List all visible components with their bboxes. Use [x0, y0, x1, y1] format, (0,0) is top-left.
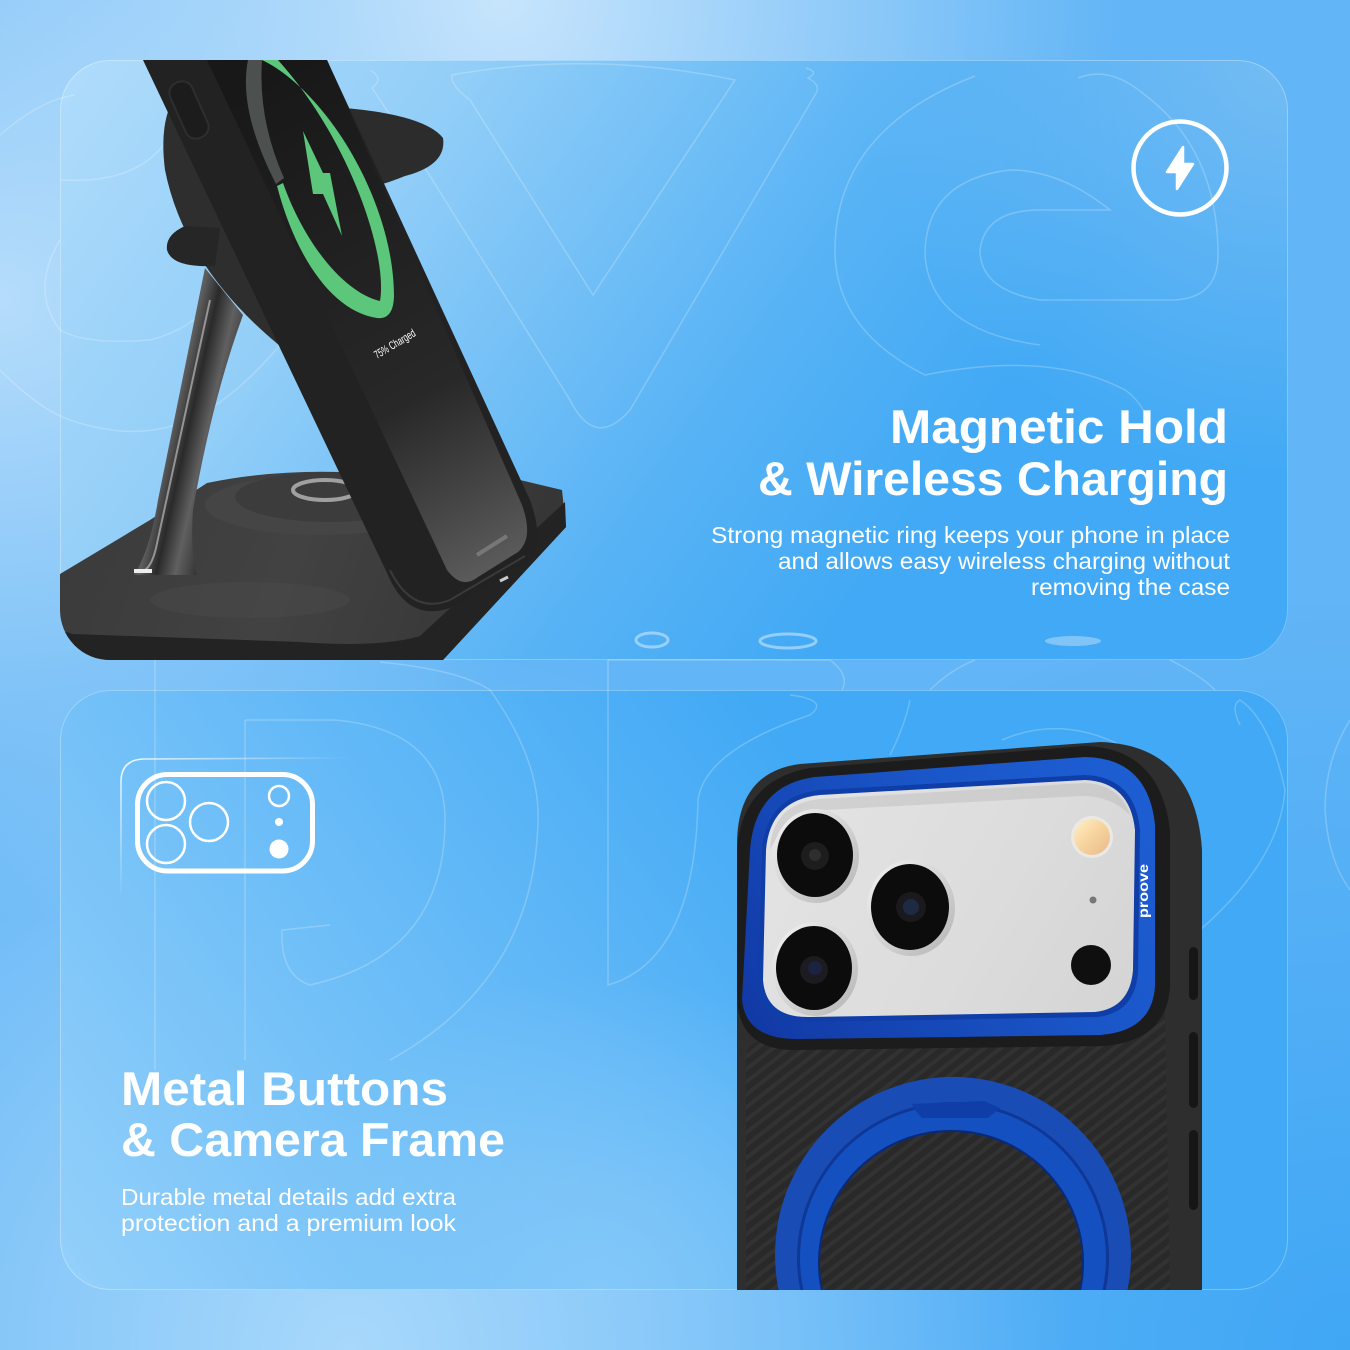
- body text: removing the case: [1031, 574, 1230, 600]
- panel background: [60, 690, 1288, 1290]
- lidar sensor: [1071, 945, 1111, 985]
- side buttons: [1189, 947, 1198, 1210]
- case shell: [737, 742, 1202, 1290]
- stand knob: [167, 226, 220, 266]
- panel: metal buttons and camera frame: [60, 660, 1350, 1290]
- watermark letter outlines: [155, 660, 1350, 1070]
- body text: [711, 522, 1230, 600]
- flash: [1071, 816, 1113, 858]
- stand back disc: [163, 112, 278, 345]
- panel background: [60, 60, 1288, 660]
- panel: magnetic hold and wireless charging: [0, 60, 1288, 660]
- body text: Strong magnetic ring keeps your phone in place: [711, 522, 1230, 548]
- carbon fibre back: [746, 1010, 1170, 1290]
- heading: Metal Buttons: [121, 1062, 448, 1115]
- icon: lightning bolt in circle: [1134, 122, 1226, 214]
- body text: [121, 1184, 457, 1236]
- charge label: 75% Charged: [372, 328, 418, 362]
- heading: & Wireless Charging: [758, 452, 1228, 505]
- icon: camera module: [121, 758, 350, 893]
- stand base: [60, 472, 566, 660]
- body text: protection and a premium look: [121, 1210, 456, 1236]
- brand label: proove: [1135, 864, 1151, 918]
- side button: [168, 80, 210, 140]
- body text: and allows easy wireless charging without: [778, 548, 1230, 574]
- microphone: [1090, 896, 1096, 904]
- camera lens bottom: [772, 922, 858, 1016]
- camera lens top: [773, 809, 859, 903]
- blue camera frame: [742, 757, 1155, 1039]
- camera window: [763, 780, 1135, 1017]
- body text: Durable metal details add extra: [121, 1184, 457, 1210]
- stand leg: [134, 268, 243, 575]
- camera lens middle: [867, 860, 955, 956]
- magnetic ring: [246, 60, 394, 318]
- frame inner step: [758, 775, 1140, 1022]
- camera bump: [737, 746, 1170, 1050]
- heading: [121, 1062, 505, 1166]
- reflected letter ellipses: [636, 633, 1101, 648]
- charging bolt: [303, 131, 342, 236]
- phone body: [143, 60, 537, 611]
- heading: [758, 400, 1228, 505]
- product: phone case back: [737, 742, 1202, 1290]
- blue magnetic ring: [775, 1077, 1131, 1290]
- heading: Magnetic Hold: [890, 400, 1228, 453]
- heading: & Camera Frame: [121, 1113, 505, 1166]
- product: phone on wireless charging stand: [60, 60, 566, 660]
- watermark letter outlines: [0, 64, 1218, 431]
- watch charger disc: [345, 108, 443, 186]
